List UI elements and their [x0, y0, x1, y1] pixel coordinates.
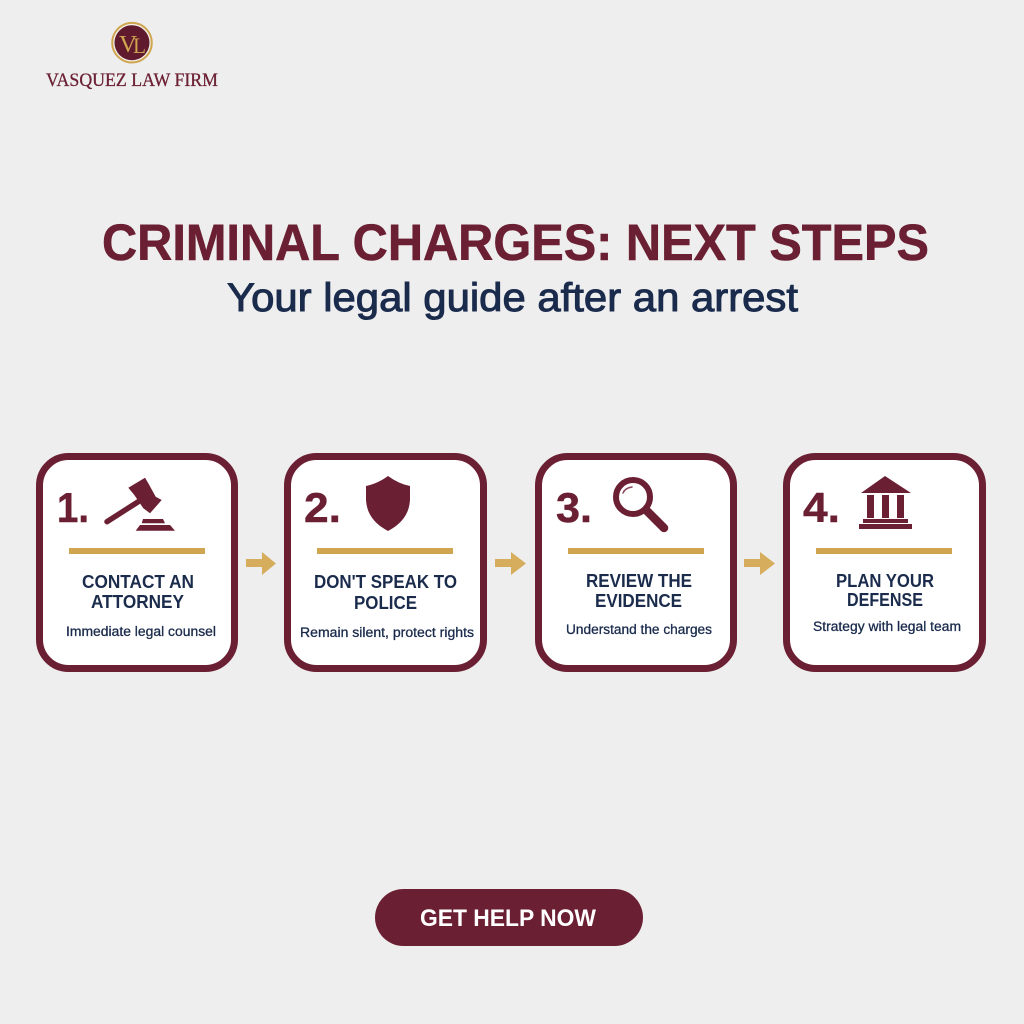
logo emblem: L [133, 33, 146, 58]
panel: step 3 review the evidence [538, 456, 734, 668]
logo wordmark: VASQUEZ LAW FIRM [46, 71, 218, 91]
step number 3: 3. [556, 484, 592, 531]
logo emblem: V [119, 32, 138, 58]
step 1 heading: CONTACT AN [82, 572, 194, 592]
step 2 heading: POLICE [354, 593, 417, 613]
step 1 description: Immediate legal counsel [66, 624, 216, 639]
icon: magnifying glass [616, 480, 664, 528]
button: get help now: GET HELP NOW [420, 905, 596, 932]
step 4 heading [836, 571, 934, 610]
arrow: step 1 to 2 [246, 552, 276, 575]
step 3 heading [586, 571, 692, 611]
step 4 heading: PLAN YOUR [836, 571, 934, 591]
step 2 heading: DON'T SPEAK TO [314, 572, 457, 592]
panel: step 1 contact an attorney [40, 456, 234, 668]
icon: shield [366, 476, 410, 531]
step 2 heading [314, 572, 457, 613]
step number 2: 2. [304, 484, 341, 531]
step 2 description: Remain silent, protect rights [300, 625, 474, 640]
step 1 heading: ATTORNEY [91, 592, 184, 612]
arrow: step 2 to 3 [495, 552, 526, 575]
step 1 heading [82, 572, 194, 612]
step 4 description: Strategy with legal team [813, 619, 961, 634]
logo emblem [112, 23, 152, 62]
step 3 heading: REVIEW THE [586, 571, 692, 591]
step 4 heading: DEFENSE [847, 590, 923, 610]
button: get help now [375, 889, 643, 946]
panel: step 4 plan your defense [786, 456, 982, 668]
subtitle: Your legal guide after an arrest [227, 276, 798, 320]
step 3 description: Understand the charges [566, 622, 712, 637]
icon: courthouse [859, 476, 912, 529]
title: CRIMINAL CHARGES: NEXT STEPS [102, 214, 929, 271]
step 3 heading: EVIDENCE [595, 591, 682, 611]
step number 1: 1. [57, 484, 89, 531]
step number 4: 4. [803, 484, 840, 531]
icon: gavel [107, 478, 175, 531]
panel: step 2 don't speak to police [288, 456, 484, 668]
logo: Vasquez Law Firm [46, 23, 218, 91]
arrow: step 3 to 4 [744, 552, 775, 575]
